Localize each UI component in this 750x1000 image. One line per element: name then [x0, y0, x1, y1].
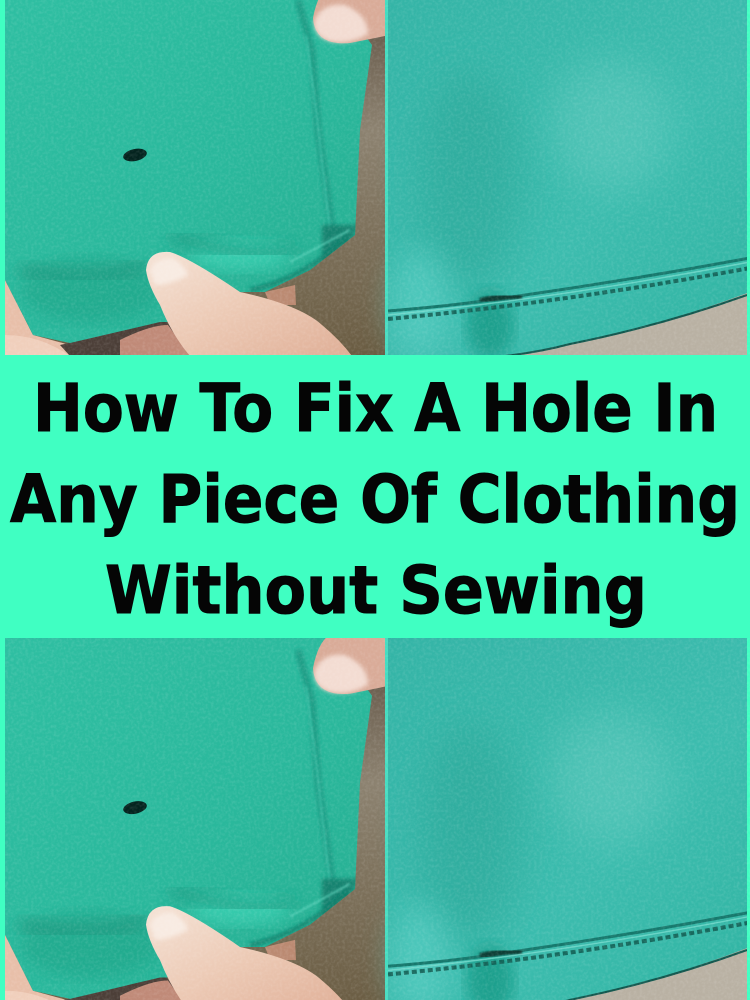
title band — [0, 355, 750, 638]
bottom photo: shirt with hole and repaired shirt — [0, 630, 750, 1000]
top photo: shirt with hole and repaired shirt — [0, 0, 750, 360]
title: Without Sewing — [105, 552, 647, 629]
title — [10, 370, 740, 629]
